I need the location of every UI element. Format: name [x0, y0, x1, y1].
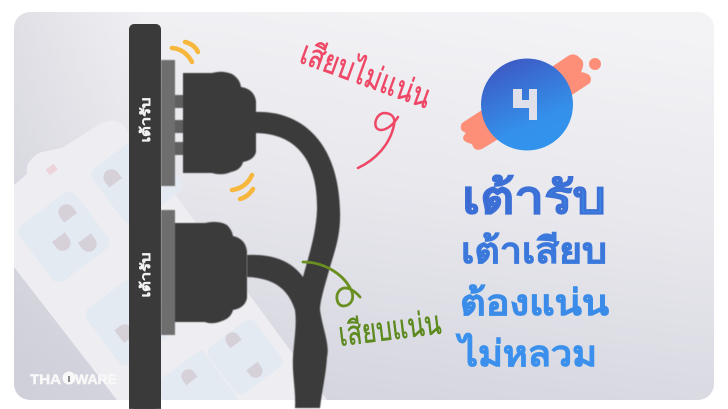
- badge: number 4: [461, 54, 601, 150]
- arrow: green curl: [303, 262, 360, 306]
- logo: ThaiWare: THA: [30, 371, 61, 387]
- title: main heading: [455, 172, 609, 374]
- icon: coral band behind badge: [461, 54, 591, 150]
- callout: tight plug text: เสียบแน่น: [336, 304, 443, 353]
- label: socket top: เต้ารับ: [138, 98, 153, 142]
- label: socket bottom: เต้ารับ: [138, 252, 153, 298]
- icon: yellow vibration marks bottom: [232, 175, 253, 199]
- arrow: red curl: [358, 113, 398, 168]
- title line 3: ต้องแน่น: [460, 282, 609, 323]
- icon: yellow vibration marks top: [172, 42, 198, 62]
- title line 2: เต้าเสียบ: [461, 230, 607, 271]
- callout: loose plug text: เสียบไม่แน่น: [296, 34, 436, 115]
- badge numeral: [513, 89, 537, 120]
- tight plug illustration: [161, 210, 247, 335]
- loose plug illustration: [161, 60, 340, 408]
- socket wall bar: [129, 24, 161, 409]
- logo: ThaiWare: [30, 371, 117, 387]
- logo: ThaiWare: WARE: [75, 371, 117, 387]
- power strip illustration: [14, 121, 327, 400]
- title: main heading: เต้ารับ: [462, 172, 606, 223]
- title line 4: ไม่หลวม: [455, 332, 597, 374]
